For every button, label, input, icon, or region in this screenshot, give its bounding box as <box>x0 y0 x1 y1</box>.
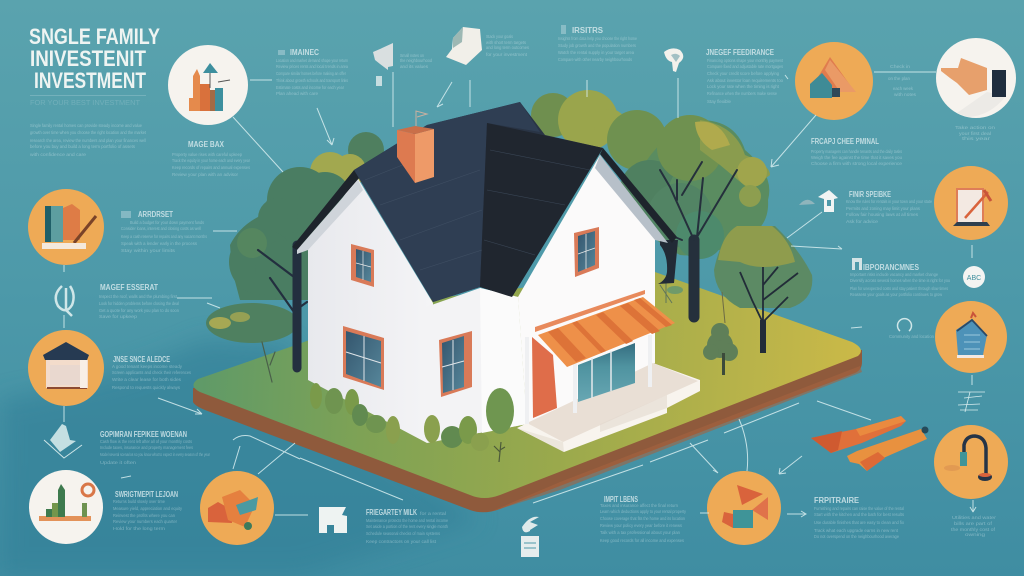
window: lower left <box>343 326 384 390</box>
label: frcapj chee pminal: Choose a firm with strong local experience <box>811 161 902 166</box>
plant near eave <box>660 280 683 303</box>
trees: olive row behind roof <box>531 90 667 170</box>
tree: tall right <box>620 115 770 317</box>
label: finir speibke: Ask for advice <box>846 219 878 224</box>
label: irsitrs: Insights from data help you choose the right home <box>558 36 637 41</box>
title paragraph <box>30 123 147 157</box>
shrubs <box>310 383 514 462</box>
label: frcapj chee pminal: Property managers can handle tenants and the daily tasks <box>811 149 903 154</box>
small icon: ring <box>898 319 912 331</box>
label: faucet note <box>951 515 997 537</box>
label: image bax: Property value rises with careful upkeep <box>172 152 242 157</box>
label: jnegef feedirance <box>706 48 784 104</box>
porch <box>517 363 700 452</box>
wall: middle <box>423 288 527 443</box>
label: small top notes: the neighbourhood <box>400 58 432 63</box>
label: irsitrs: Watch the rental supply in your target area <box>558 50 634 55</box>
wall: left gable <box>308 177 433 443</box>
label: image bax: MAGE BAX <box>188 140 225 149</box>
label: arrdrset: Speak with a lender early in the process <box>121 241 198 246</box>
label: ibporancmnes: Reassess your goals as your portfolio continues to grow <box>850 292 943 297</box>
label: ibporancmnes: Diversify across several homes when the time is right for you <box>850 278 950 283</box>
circle: roof triangle <box>795 42 873 120</box>
roof back <box>354 102 603 302</box>
label: friegartey milk: Maintenance protects the home and rental income <box>366 518 448 523</box>
label: irsitrs: Compare with other nearby neighbourhoods <box>558 57 633 62</box>
label: arrdrset: ARRDRSET <box>138 210 173 219</box>
background trees behind house <box>206 90 667 343</box>
circle: pointing hand <box>936 38 1016 118</box>
label: connector note: each week <box>893 86 914 91</box>
label: finir speibke: Follow fair housing laws at all times <box>846 212 919 217</box>
label: arrdrset <box>121 210 208 253</box>
title block <box>29 24 160 107</box>
title paragraph: Single family rental homes can provide steady income and value <box>30 123 142 128</box>
label: hand note <box>955 125 996 141</box>
label: jnse snce aledce: JNSE SNCE ALEDCE <box>113 355 170 364</box>
label: arrdrset: Keep a cash reserve for repairs and any vacant months <box>121 234 208 239</box>
trunk under eave <box>658 240 678 284</box>
label: swrigtmepit: Review your numbers each quarter <box>113 519 177 524</box>
tool icons <box>811 416 928 471</box>
label: faucet note: bills are part of <box>954 521 993 526</box>
label: swrigtmepit: Returns build slowly over time <box>113 499 165 504</box>
label: jnegef feedirance: Stay flexible <box>707 99 731 104</box>
label: frpitraire: Furnishing and repairs can raise the value of the rental <box>814 506 904 511</box>
label: friegartey milk: Keep contractors on your call list <box>366 539 437 544</box>
small icon: white block <box>319 507 347 533</box>
porch posts <box>527 335 650 424</box>
label: gopimran <box>100 430 210 465</box>
label: connector note: on the plan <box>888 76 910 81</box>
title paragraph: with confidence and care <box>30 152 86 157</box>
label: gopimran: Cash flow is the rent left after all of your monthly costs <box>100 439 193 444</box>
label: frcapj chee pminal <box>811 137 903 166</box>
label: jnegef feedirance: Refinance when the numbers make sense <box>707 91 777 96</box>
circle: buildings chart <box>168 45 248 125</box>
label: image bax: Review your plan with an advisor <box>172 172 238 177</box>
title paragraph: before you buy and build a long term portfolio of assets <box>30 144 136 149</box>
label: swrigtmepit <box>113 490 183 531</box>
label: jnegef feedirance: JNEGEF FEEDIRANCE <box>706 48 775 57</box>
label: faucet note: Utilities and water <box>952 515 997 520</box>
label: frpitraire <box>814 496 905 539</box>
label: top left <box>276 48 349 96</box>
title block: FOR YOUR BEST INVESTMENT <box>30 100 141 107</box>
label: swrigtmepit: Measure yield, appreciation and equity <box>113 506 183 511</box>
label: impit lbens: Keep good records for all income and expenses <box>600 538 685 543</box>
label: finir speibke: Know the rules for rentals in your town and your state <box>846 199 932 204</box>
label: impit lbens: Review your policy every year before it renews <box>600 523 683 528</box>
label: friegartey milk: Schedule seasonal checks of main systems <box>366 531 441 536</box>
label: impit lbens: Choose coverage that fits the home and its location <box>600 516 685 521</box>
label: jnegef feedirance: Financing options shape your monthly payment <box>707 58 784 63</box>
label: ibporancmnes: IBPORANCMNES <box>863 263 920 272</box>
label: impit lbens: Talk with a tax professional about your plan <box>600 530 680 535</box>
title paragraph: research the area, review the numbers and plan your finances well <box>30 138 146 143</box>
tree: left canopy <box>229 132 384 300</box>
label: frcapj chee pminal: Weigh the fee against the time that it saves you <box>811 155 902 160</box>
label: hand note: your first deal <box>959 131 991 136</box>
circle: house icon <box>28 330 104 406</box>
porch window <box>578 343 635 402</box>
label: frpitraire: Track what each upgrade earns in new rent <box>814 528 899 533</box>
door <box>532 337 557 418</box>
label: jnse snce aledce: Screen applicants and check their references <box>112 370 192 375</box>
label: jnse snce aledce: Respond to requests quickly always <box>112 385 181 390</box>
label: finir speibke: Permits and zoning may limit your plans <box>846 206 921 211</box>
window: center <box>439 331 472 397</box>
label: magef esserat: MAGEF ESSERAT <box>100 283 158 292</box>
label: friegartey milk: Set aside a portion of the rent every single month <box>366 524 448 529</box>
label: frpitraire: Use durable finishes that are easy to clean and fix <box>814 520 905 525</box>
label: connector note: with notes <box>894 92 917 97</box>
label: swrigtmepit: Reinvest the profits where you can <box>113 513 175 518</box>
label: jnegef feedirance: Compare fixed and adjustable rate mortgages <box>707 64 784 69</box>
platform: grass island <box>193 272 862 512</box>
label: jnegef feedirance: Lock your rate when the timing is right <box>707 84 780 89</box>
label: ibporancmnes: Plan for unexpected costs and stay patient through slow times <box>850 286 949 291</box>
label: top left: Plan ahead with care <box>276 91 318 96</box>
label: block notes: and long term outcomes <box>486 45 530 50</box>
label: impit lbens <box>600 495 687 543</box>
label: ring note: Community and location <box>889 334 934 339</box>
label: top left: Estimate costs and income for each year <box>276 85 344 90</box>
label: ibporancmnes: Important risks include vacancy and market change <box>850 272 938 277</box>
title block: INIVESTENIT <box>30 46 146 71</box>
label: jnegef feedirance: Check your credit score before applying <box>707 71 779 76</box>
title paragraph: growth over time when you choose the right location and the market <box>30 130 147 135</box>
label: block notes: with short term targets <box>486 40 527 45</box>
label: swrigtmepit: Hold for the long term <box>113 526 165 531</box>
label: top left: Location and market demand shape your return <box>276 58 348 63</box>
circle: books and pen <box>28 189 104 265</box>
house <box>292 102 700 462</box>
small icon: ornament key <box>56 286 74 316</box>
label: jnse snce aledce: Write a clear lease for both sides <box>112 377 182 382</box>
circle: box and kite <box>707 471 781 545</box>
label: block notes: Stack your goals <box>486 34 514 39</box>
small icon: stacked shape <box>446 27 482 65</box>
label: friegartey milk: for a rental <box>420 511 446 516</box>
left tree trunk and stick <box>258 245 307 382</box>
circle: growth chart <box>29 470 103 544</box>
label: small top notes <box>400 53 432 69</box>
small icon: badge <box>963 266 985 288</box>
label: image bax: Keep records of repairs and annual expenses <box>172 165 251 170</box>
circle: faucet <box>934 425 1008 499</box>
label: impit lbens: Learn which deductions apply to your rental property <box>600 509 687 514</box>
label: jnse snce aledce: A good tenant keeps income steady <box>112 364 183 369</box>
label: connector note: Check in <box>890 64 910 69</box>
small icon: diamond <box>44 424 82 458</box>
window: upper left <box>351 244 374 287</box>
label: magef esserat: Inspect the roof, walls and the plumbing first <box>99 294 178 299</box>
label: frpitraire: Start with the kitchen and the bath for best results <box>814 512 905 517</box>
tree: small bush <box>703 292 738 375</box>
label: frpitraire: Do not overspend on the neighbourhood average <box>814 534 899 539</box>
label: arrdrset: Build a budget for your down payment funds <box>130 220 205 225</box>
circle: orange house blocks <box>200 471 274 545</box>
label: jnse snce aledce <box>112 355 192 390</box>
label: frpitraire: FRPITRAIRE <box>814 496 860 505</box>
label: gopimran: Update it often <box>100 460 137 465</box>
label: magef esserat: Look for hidden problems before closing the deal <box>99 301 179 306</box>
small icon: house outline <box>799 190 838 212</box>
small icon: palm sketch <box>958 392 985 412</box>
label: friegartey milk: FRIEGARTEY MILK <box>366 508 417 517</box>
roof: left plane <box>354 102 540 302</box>
small icon: question mark <box>664 48 683 72</box>
label: irsitrs <box>558 25 637 62</box>
tree: lower left bush <box>206 303 298 343</box>
tree: small right <box>714 226 812 353</box>
label: frcapj chee pminal: FRCAPJ CHEE PMINAL <box>811 137 879 146</box>
label: top left: Compare similar homes before making an offer <box>276 71 346 76</box>
label: top left: IMAINEC <box>290 48 319 57</box>
label: arrdrset: Consider loans, interest and closing costs as well <box>121 226 201 231</box>
small icon: pillar <box>852 258 862 270</box>
title block: SNGLE FAMILY <box>29 24 160 49</box>
label: small top notes: Small notes on <box>400 53 424 58</box>
label: irsitrs: IRSITRS <box>572 26 604 35</box>
arrows and connector lines <box>64 72 976 517</box>
window: upper right <box>574 227 599 277</box>
label: small top notes: and its values <box>400 64 429 69</box>
label: image bax <box>172 140 251 177</box>
label: arrdrset: Stay within your limits <box>121 248 176 253</box>
circle: tablet and tool <box>934 166 1008 240</box>
label: block notes <box>486 34 530 57</box>
label: top left: Review prices rents and local trends in area <box>276 64 348 69</box>
label: ibporancmnes <box>850 263 950 297</box>
small icon: document <box>521 517 539 557</box>
label: block notes: for your investment <box>486 52 528 57</box>
title block: INVESTMENT <box>34 68 146 93</box>
label: gopimran: GOPIMRAN FEPIKEE WOENAN <box>100 430 187 439</box>
chimney <box>397 111 434 183</box>
label: image bax: Track the equity in your home each and every year <box>172 158 250 163</box>
label: faucet note: the monthly cost of <box>951 527 996 532</box>
wall: right gable <box>518 155 655 424</box>
label: swrigtmepit: SWRIGTMEPIT LEJOAN <box>115 490 178 499</box>
label: impit lbens: Taxes and insurance affect the final return <box>600 503 678 508</box>
label: hand note: this year <box>962 136 991 141</box>
label: friegartey milk <box>366 508 448 544</box>
label: top left: Think about growth schools and transport links <box>276 78 349 83</box>
label: finir speibke <box>846 190 932 224</box>
label: magef esserat <box>99 283 179 319</box>
eaves <box>292 170 360 250</box>
label: finir speibke: FINIR SPEIBKE <box>849 190 891 199</box>
label: gopimran: Include taxes, insurance and property management fees <box>100 445 194 450</box>
label: magef esserat: Get a quote for any work you plan to do soon <box>99 308 179 313</box>
roof: right plane <box>480 123 603 297</box>
small icon: badge: ABC <box>967 275 981 282</box>
label: magef esserat: Save for upkeep <box>99 314 137 319</box>
label: impit lbens: IMPIT LBENS <box>604 495 638 504</box>
small icon: map flag <box>373 43 393 86</box>
label: faucet note: owning <box>965 532 986 537</box>
label: gopimran: Model several scenarios so you know what to expect in every season of the year <box>100 452 210 457</box>
label: jnegef feedirance: Ask about investor loan requirements too <box>707 78 783 83</box>
circle: blue house <box>935 301 1007 373</box>
label: irsitrs: Study job growth and the population numbers <box>558 43 637 48</box>
label: hand note: Take action on <box>955 125 996 130</box>
awning <box>535 290 675 367</box>
label: connector note <box>888 64 917 97</box>
